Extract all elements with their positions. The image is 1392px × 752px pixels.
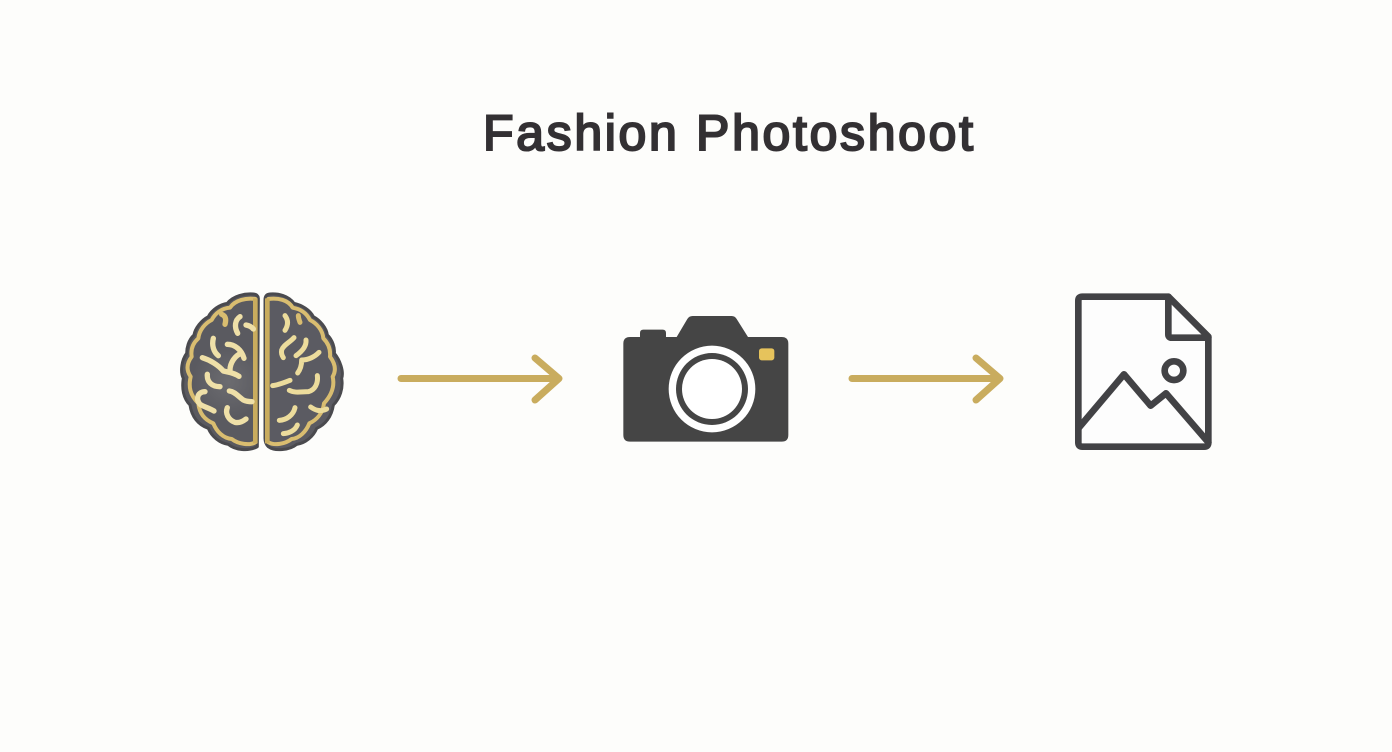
camera lens: [669, 346, 755, 432]
icon: brain: [182, 294, 342, 450]
page fold: [1168, 297, 1208, 338]
brain right hemisphere: [265, 294, 342, 450]
icon: image file: [1078, 297, 1208, 447]
sun: [1165, 361, 1183, 380]
camera top button: [640, 330, 666, 337]
arrow: camera to image file: [852, 358, 1000, 400]
brain left hemisphere: [182, 294, 258, 450]
title: Fashion Photoshoot: [483, 105, 973, 161]
camera body: [623, 316, 788, 442]
icon: camera: [623, 316, 788, 442]
arrow: brain to camera: [401, 358, 559, 400]
mountains: [1078, 374, 1208, 442]
camera flash: [759, 348, 774, 360]
file outline: [1078, 297, 1208, 447]
